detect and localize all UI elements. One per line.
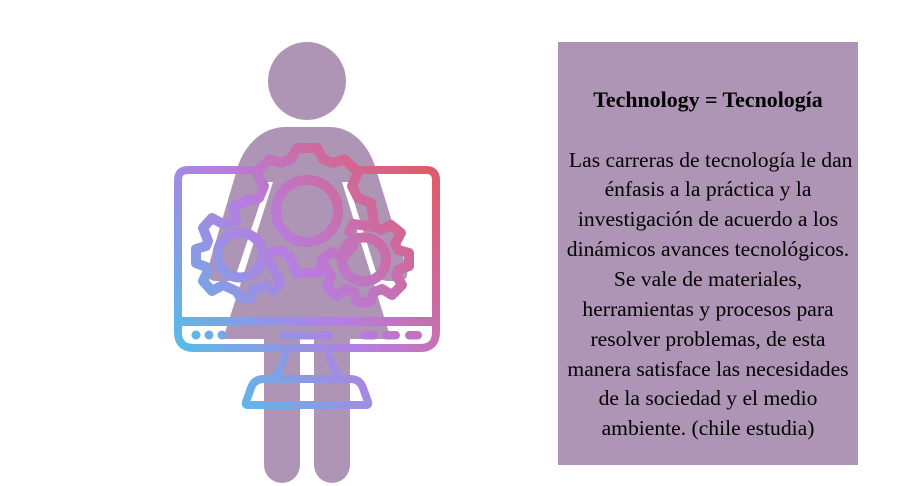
icon: monitor bbox=[178, 170, 436, 405]
body text: Las carreras de tecnología le dan énfasis a la práctica y la investigación de acuerdo a los dinámicos avances tecnológicos. Se vale de materiales, herramientas y procesos para resolver problemas, de esta manera satisface las necesidades de la sociedad y el medio ambiente. (chile estudia) bbox=[567, 148, 852, 440]
left leg bbox=[264, 335, 300, 483]
icon: gears bbox=[196, 148, 409, 302]
centre pill bbox=[280, 331, 333, 340]
right gear bbox=[323, 224, 409, 302]
person silhouette bbox=[208, 42, 407, 483]
right pills bbox=[360, 331, 422, 340]
left gear bbox=[196, 199, 281, 298]
monitor frame bbox=[178, 170, 436, 348]
head bbox=[268, 42, 346, 120]
monitor divider bbox=[178, 317, 436, 326]
monitor base bbox=[246, 379, 368, 405]
monitor stand bbox=[273, 352, 341, 378]
main gear bbox=[241, 148, 375, 273]
status dots bbox=[192, 330, 226, 340]
right leg bbox=[314, 335, 350, 483]
dress and arms bbox=[208, 127, 407, 339]
heading: Technology = Tecnología bbox=[593, 87, 823, 112]
panel: technology definition bbox=[558, 42, 858, 465]
